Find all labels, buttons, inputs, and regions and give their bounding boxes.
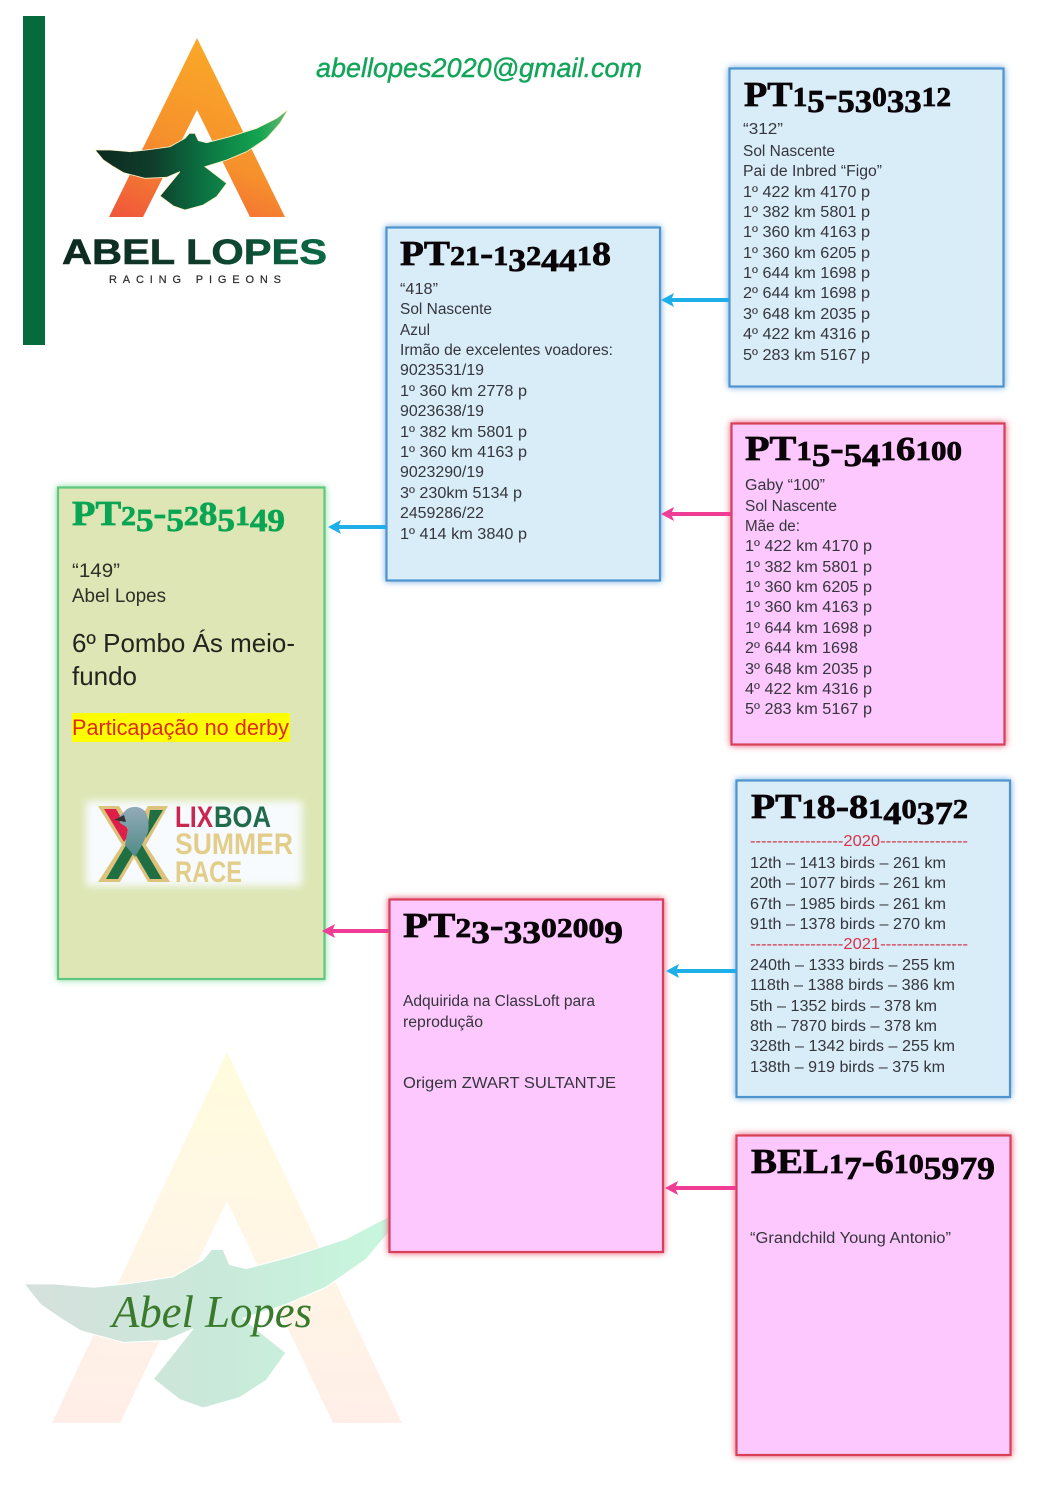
watermark signature: Abel Lopes [109,1286,312,1337]
details text: Sol Nascente [400,301,492,318]
arrow: PT21-1324418 to PT25-5285149 [328,520,386,534]
panel background [390,900,663,1252]
panel background [58,488,324,979]
details text: 9023290/19 [400,464,484,481]
arrow: PT15-5416100 to PT21-1324418 [661,507,731,521]
arrow: PT23-3302009 to PT25-5285149 [322,924,389,938]
logo wordmark: ABEL LOPES [62,233,327,272]
arrow: PT18-8140372 to PT23-3302009 [666,964,736,978]
details text: 2459286/22 [400,505,484,522]
logo pigeon head [119,807,149,857]
details text: Gaby “100” [745,477,825,494]
logo pigeon [95,109,288,210]
heading: PT25-5285149 [72,494,285,538]
details text: 5º 283 km 5167 p [745,701,872,718]
panel background [736,780,1010,1097]
details text: 1º 360 km 4163 p [745,599,872,616]
details text: 1º 360 km 2778 p [400,383,527,400]
logo X gold outline [98,806,170,882]
details text: “312” [743,121,783,138]
logo letter A [109,38,285,217]
details text: Pai de Inbred “Figo” [743,163,882,180]
details text: reprodução [403,1014,483,1031]
panel: PT15-5303312 [730,68,1004,386]
details text: 1º 360 km 4163 p [743,224,870,241]
details text: 3º 230km 5134 p [400,485,522,502]
details text: 1º 360 km 6205 p [743,245,870,262]
details text: 1º 360 km 4163 p [400,444,527,461]
race results 2021 [750,936,968,1076]
achievement [72,628,295,691]
heading: BEL 17-6105979 [751,1142,995,1186]
details text [403,993,616,1092]
logo pigeon beak [114,815,126,822]
details text: Azul [400,322,430,339]
panel background [386,228,660,580]
details text: “Grandchild Young Antonio” [750,1230,951,1247]
details text: 1º 422 km 4170 p [745,538,872,555]
details text: 1º 644 km 1698 p [745,620,872,637]
details text: Sol Nascente [745,498,837,515]
email address: abellopes2020@gmail.com [316,53,642,83]
details text: 1º 382 km 5801 p [743,204,870,221]
details text: 2º 644 km 1698 [745,640,858,657]
details text: “418” [400,281,438,298]
panel background [736,1136,1010,1455]
details text: Adquirida na ClassLoft para [403,993,595,1010]
details text: 1º 644 km 1698 p [743,265,870,282]
details text: 1º 422 km 4170 p [743,184,870,201]
race results 2020: 91th – 1378 birds – 270 km [750,916,946,933]
logo: Lixboa Summer Race [86,801,302,889]
details text: 1º 382 km 5801 p [400,424,527,441]
panel: PT23-3302009 [390,900,663,1252]
race results 2020: -----------------2020---------------- [750,833,968,850]
arrow: PT15-5303312 to PT21-1324418 [661,293,729,307]
panel: BEL17-6105979 [736,1136,1010,1455]
details text: 9023638/19 [400,403,484,420]
watermark pigeon shape [24,1200,409,1408]
details text [743,121,882,364]
heading: PT21-1324418 [400,234,611,278]
details text: Mãe de: [745,518,800,535]
heading: PT 23-3302009 [403,906,623,950]
logo X green fill [106,810,163,879]
details text [400,281,613,543]
details text: 4º 422 km 4316 p [745,681,872,698]
derby highlight: Particapação no derby [72,715,289,740]
race results 2021: 118th – 1388 birds – 386 km [750,977,955,994]
details text: 1º 360 km 6205 p [745,579,872,596]
details text: Origem ZWART SULTANTJE [403,1075,616,1092]
heading: PT15-5416100 [745,429,962,473]
race results 2021: 138th – 919 birds – 375 km [750,1059,945,1076]
panel: PT15-5416100 [732,424,1004,744]
name and loft: “149” [72,561,120,582]
details text [745,477,872,718]
race results 2021: 8th – 7870 birds – 378 km [750,1018,937,1035]
details text: 9023531/19 [400,362,484,379]
achievement: fundo [72,661,137,691]
race results 2021: 5th – 1352 birds – 378 km [750,998,937,1015]
logo wordmark [175,801,293,889]
details text: Irmão de excelentes voadores: [400,342,613,359]
race results 2021: 328th – 1342 birds – 255 km [750,1038,955,1055]
panel: PT18-8140372 [736,780,1010,1097]
heading: PT15-5303312 [744,75,951,119]
details text: 3º 648 km 2035 p [745,661,872,678]
details text: 2º 644 km 1698 p [743,285,870,302]
race results 2021: -----------------2021---------------- [750,936,968,953]
name and loft [72,561,166,607]
watermark logo [24,1052,409,1423]
race results 2020 [750,833,968,933]
details text: 4º 422 km 4316 p [743,326,870,343]
panel background [732,424,1004,744]
details text: Sol Nascente [743,143,835,160]
race results 2020: 12th – 1413 birds – 261 km [750,855,946,872]
green side bar [23,16,45,345]
details text: 1º 414 km 3840 p [400,526,527,543]
race results 2020: 20th – 1077 birds – 261 km [750,875,946,892]
panel: PT25-5285149 [58,488,324,979]
logo wordmark: BOA [214,801,271,834]
race results 2020: 67th – 1985 birds – 261 km [750,896,946,913]
name and loft: Abel Lopes [72,586,166,607]
logo: Abel Lopes Racing Pigeons [62,38,327,286]
logo X red accent [104,809,130,842]
panel background [730,68,1004,386]
logo wordmark: RACE [175,856,242,889]
watermark letter A [52,1052,402,1423]
logo tagline: RACING PIGEONS [109,274,281,286]
race results 2021: 240th – 1333 birds – 255 km [750,957,955,974]
details text: 3º 648 km 2035 p [743,306,870,323]
details text: 1º 382 km 5801 p [745,559,872,576]
logo backdrop [86,801,302,886]
details text: 5º 283 km 5167 p [743,347,870,364]
achievement: 6º Pombo Ás meio- [72,628,295,658]
logo wordmark: SUMMER [175,828,293,861]
panel: PT21-1324418 [386,228,660,580]
heading: PT18-8140372 [751,787,968,831]
arrow: BEL17-6105979 to PT23-3302009 [665,1181,736,1195]
logo wordmark: LIX [175,801,213,834]
